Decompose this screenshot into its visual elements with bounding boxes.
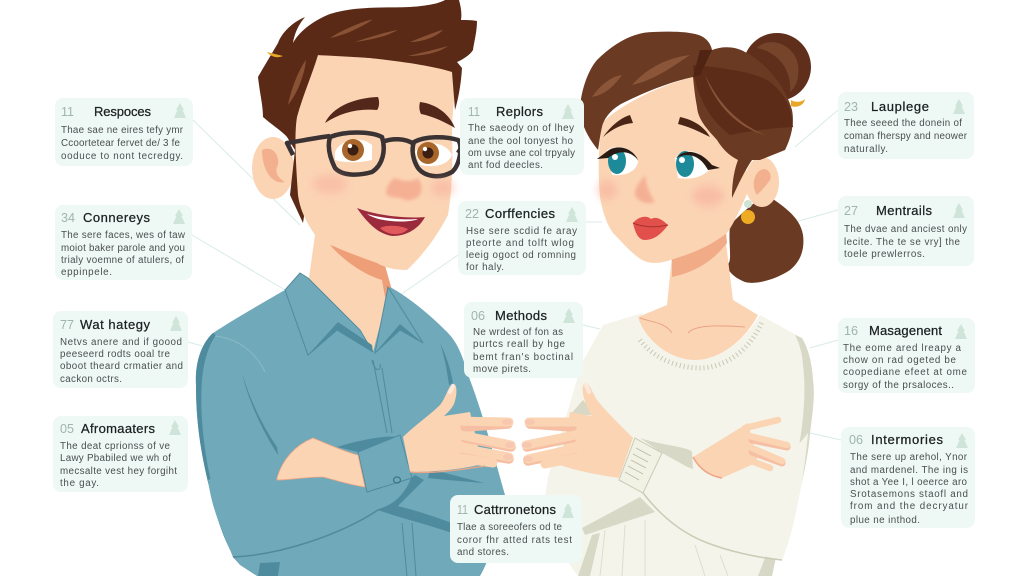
woman: lips xyxy=(633,217,668,240)
man: ear xyxy=(252,137,294,199)
card: Lauplege: Thee seeed the donein of xyxy=(844,118,962,129)
woman: right hand xyxy=(693,420,787,478)
card: Cattrronetons: coror fhr atted rats test xyxy=(457,535,572,546)
woman: collarbone xyxy=(640,318,745,333)
man: right hand xyxy=(403,384,515,473)
card: Replors: ane the ool tonyest ho xyxy=(468,136,574,147)
card: Replors: ant fod deecles. xyxy=(468,160,543,171)
card: Mentrails: Mentrails xyxy=(876,203,932,218)
card: Intermories: 06 xyxy=(849,432,863,447)
card: Intermories: The sere up arehol, Ynor xyxy=(850,452,968,463)
man: hair back xyxy=(258,43,457,223)
man: mouth xyxy=(357,208,425,236)
man: forearm sleeve xyxy=(208,475,412,557)
card: Replors: Replors xyxy=(496,104,544,119)
card: Corffencies: pteorte and tolft wlog xyxy=(466,238,574,249)
card: Wat hategy: Wat hategy xyxy=(80,317,150,332)
woman: sweater cuff xyxy=(619,438,662,493)
card: Respoces: 11 xyxy=(61,104,74,119)
icon: tree xyxy=(953,99,965,114)
card: Respoces xyxy=(55,98,193,166)
card: Methods: bemt fran's boctinal xyxy=(473,352,573,363)
card: Intermories: shot a Yee I, l oeerce aro xyxy=(850,477,968,488)
card: Masagenent: Masagenent xyxy=(869,323,942,338)
card: Corffencies: Corffencies xyxy=(485,206,556,221)
woman: left hand xyxy=(522,383,633,478)
woman: cheeks xyxy=(597,180,724,207)
woman: hair band xyxy=(791,99,805,107)
card: Corffencies xyxy=(458,201,586,275)
woman: face xyxy=(599,77,750,263)
woman: nose xyxy=(635,175,655,203)
woman: eyebrows xyxy=(603,115,710,137)
card: Mentrails xyxy=(838,196,974,266)
card: Mentrails: lecite. The te se vry] the xyxy=(844,237,961,248)
card: Corffencies: Hse sere scdid fe aray xyxy=(466,226,577,237)
connector lines xyxy=(188,110,841,440)
man: eyes xyxy=(335,139,452,166)
card: Wat hategy: 77 xyxy=(60,317,74,332)
woman: hair shading xyxy=(592,50,793,135)
card: Intermories: Intermories xyxy=(871,432,944,447)
card: Lauplege xyxy=(838,92,974,159)
card: Cattrronetons: and stores. xyxy=(457,547,509,558)
card: Methods: purtcs reall by hge xyxy=(473,339,566,350)
card: Methods: Methods xyxy=(495,308,548,323)
card: Lauplege: coman fherspy and neower xyxy=(844,131,968,142)
woman: ear xyxy=(745,157,779,207)
icon: tree xyxy=(953,203,965,218)
card: Connereys xyxy=(55,205,192,280)
man: eyebrows xyxy=(325,97,455,128)
woman: bun xyxy=(743,33,811,101)
card: Connereys: trialy voemne of atulers, of xyxy=(61,255,184,266)
woman: eyes xyxy=(597,147,720,179)
card: Afromaaters: mecsalte vest hey forgiht xyxy=(60,466,177,477)
icon: tree xyxy=(566,207,578,222)
icon: tree xyxy=(956,433,968,448)
card: Wat hategy: Netvs anere and if goood xyxy=(60,337,182,348)
card: Wat hategy: cackon octrs. xyxy=(60,374,122,385)
card: Connereys: Connereys xyxy=(83,210,150,225)
woman: ponytail xyxy=(727,195,803,283)
card: Replors: om uvse ane col trpyaly xyxy=(468,148,575,159)
man: nose xyxy=(386,178,422,200)
card: Corffencies: 22 xyxy=(465,206,479,221)
card: Cattrronetons: Cattrronetons xyxy=(474,502,556,517)
card: Intermories xyxy=(841,427,975,528)
icon: tree xyxy=(562,503,574,518)
card: Corffencies: leeig ogoct od romning xyxy=(466,250,576,261)
icon: tree xyxy=(170,316,182,331)
card: Connereys: The sere faces, wes of taw xyxy=(61,230,186,241)
man: face xyxy=(295,55,457,270)
card: Lauplege: naturally. xyxy=(844,144,888,155)
card: Respoces: Respoces xyxy=(94,104,152,119)
card: Masagenent: The eome ared lreapy a xyxy=(843,343,962,354)
man: neck xyxy=(308,235,392,352)
man: shirt shading xyxy=(196,333,485,576)
woman: neck xyxy=(638,235,758,360)
man: hair highlights xyxy=(288,20,448,105)
card: Afromaaters: Afromaaters xyxy=(81,421,156,436)
card: Corffencies: for haly. xyxy=(466,262,504,273)
card: Mentrails: 27 xyxy=(844,203,858,218)
card: Lauplege: Lauplege xyxy=(871,99,929,114)
card: Masagenent: 16 xyxy=(844,323,858,338)
icon: tree xyxy=(169,420,181,435)
card: Mentrails: toele prewlerros. xyxy=(844,249,925,260)
man: left hand xyxy=(277,438,365,487)
card: Cattrronetons: Tlae a soreeofers od te xyxy=(457,522,563,533)
icon: tree xyxy=(174,103,186,118)
card: Connereys: moiot baker parole and you xyxy=(61,243,185,254)
icon: tree xyxy=(173,209,185,224)
card: Replors xyxy=(460,98,584,175)
card: Masagenent: sorgy of the prsaloces.. xyxy=(843,380,954,391)
card: Connereys: eppinpele. xyxy=(61,267,112,278)
card: Cattrronetons xyxy=(450,495,582,563)
woman: sweater xyxy=(545,313,814,576)
card: Wat hategy: oboot theard crmatier and xyxy=(60,361,183,372)
icon: tree xyxy=(955,324,967,339)
card: Cattrronetons: 11 xyxy=(457,502,468,517)
card: Replors: 11 xyxy=(468,104,480,119)
card: Lauplege: 23 xyxy=(844,99,858,114)
icon: tree xyxy=(562,104,574,119)
card: Wat hategy xyxy=(53,311,188,388)
man: collar xyxy=(285,273,423,355)
man: hair top xyxy=(278,0,477,110)
card: Masagenent: coopediane efeet at ome xyxy=(843,367,968,378)
card: Afromaaters xyxy=(53,416,188,492)
card: Afromaaters: Lawy Pbabiled we wh of xyxy=(60,453,171,464)
woman: forearm sleeve xyxy=(643,433,808,560)
card: Afromaaters: 05 xyxy=(60,421,74,436)
card: Respoces: Ccoortetear fervet de/ 3 fe xyxy=(61,138,181,149)
card: Intermories: plue ne inthod. xyxy=(850,515,920,526)
card: Methods: 06 xyxy=(471,308,485,323)
card: Masagenent: chow on rad ogeted be xyxy=(843,355,957,366)
man: cheeks xyxy=(313,174,455,197)
icon: tree xyxy=(563,308,575,323)
card: Afromaaters: the gay. xyxy=(60,478,99,489)
man illustration xyxy=(196,0,515,576)
woman: sweater shading xyxy=(570,335,814,576)
woman illustration xyxy=(522,32,814,576)
card: Methods xyxy=(464,302,583,378)
man: glasses xyxy=(287,132,463,176)
card: Respoces: Thae sae ne eires tefy ymr xyxy=(61,125,184,136)
card: Intermories: Srotasemons staofl and xyxy=(850,489,968,500)
man: shirt cuff xyxy=(358,435,412,492)
card: Wat hategy: peeseerd rodts ooal tre xyxy=(60,349,171,360)
card: Respoces: ooduce to nont tecredgy. xyxy=(61,151,183,162)
card: Replors: The saeody on of lhey xyxy=(468,123,574,134)
card: Intermories: from and the decryatur xyxy=(850,501,969,512)
card: Afromaaters: The deat cprionss of ve xyxy=(60,441,171,452)
woman: skirt pleat lines xyxy=(600,520,728,576)
card: Intermories: and mardenel. The ing is xyxy=(850,465,968,476)
card: Methods: Ne wrdest of fon as xyxy=(473,327,563,338)
man: hair clip xyxy=(267,52,283,57)
card: Masagenent xyxy=(838,318,975,393)
woman: earring xyxy=(741,200,755,224)
card: Connereys: 34 xyxy=(61,210,75,225)
woman: sweater ribbing xyxy=(640,322,762,368)
woman: hair main xyxy=(580,32,793,198)
man: shirt placket xyxy=(215,336,416,576)
card: Methods: move pirets. xyxy=(473,364,531,375)
card: Mentrails: The dvae and anciest only xyxy=(844,224,967,235)
man: shirt body xyxy=(196,273,505,576)
